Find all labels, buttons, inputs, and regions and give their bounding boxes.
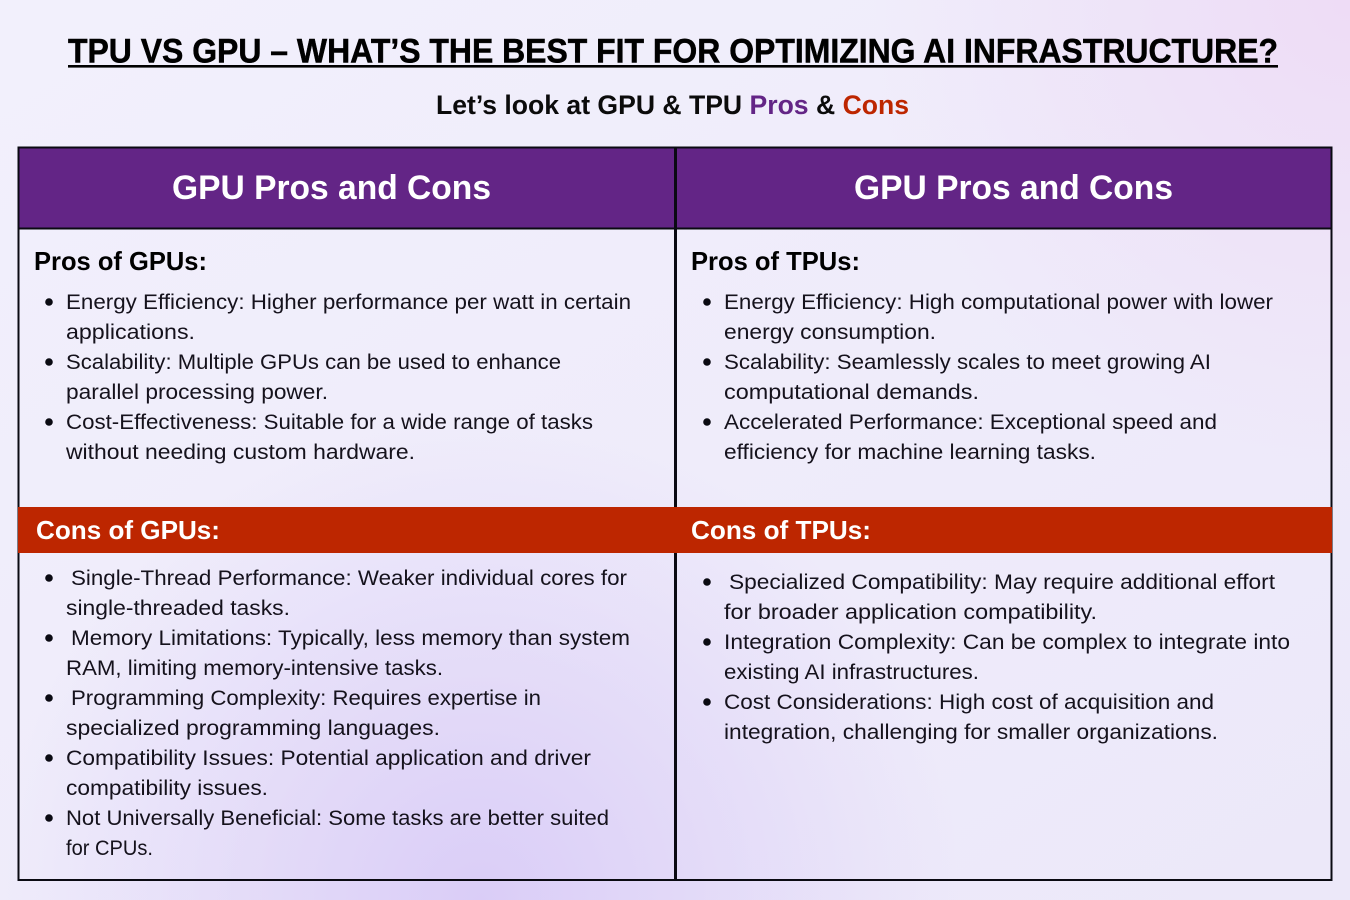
subtitle: Let’s look at GPU & TPU Pros & Cons bbox=[436, 90, 909, 120]
red band: cons headings: Cons of GPUs: bbox=[36, 515, 220, 545]
list: pros of TPUs bbox=[703, 290, 1273, 464]
list: cons of GPUs: for CPUs. bbox=[66, 836, 153, 860]
header: right column: GPU Pros and Cons bbox=[854, 169, 1173, 207]
list: pros of TPUs: Accelerated Performance: Exceptional speed and bbox=[724, 410, 1217, 434]
list: pros of GPUs: parallel processing power. bbox=[66, 380, 328, 404]
list: pros of GPUs: applications. bbox=[66, 320, 195, 344]
list: cons of TPUs: existing AI infrastructures. bbox=[724, 660, 979, 684]
list: cons of TPUs: for broader application compatibility. bbox=[724, 600, 1097, 624]
list: cons of GPUs: Not Universally Beneficial: Some tasks are better suited bbox=[66, 806, 609, 830]
list: cons of TPUs: Specialized Compatibility: May require additional effort bbox=[729, 570, 1275, 594]
table frame bbox=[18, 147, 1332, 880]
list: cons of GPUs: specialized programming languages. bbox=[66, 716, 440, 740]
list: cons of GPUs: compatibility issues. bbox=[66, 776, 268, 800]
list: pros of GPUs: Cost-Effectiveness: Suitable for a wide range of tasks bbox=[66, 410, 593, 434]
panel: pros of TPUs bbox=[691, 246, 1273, 464]
list: cons of GPUs: Memory Limitations: Typically, less memory than system bbox=[71, 626, 630, 650]
list: pros of TPUs: efficiency for machine learning tasks. bbox=[724, 440, 1096, 464]
header: right column bbox=[675, 147, 1332, 229]
red band: cons headings bbox=[18, 507, 1332, 553]
header: left column bbox=[18, 147, 675, 229]
list: cons of GPUs bbox=[45, 566, 630, 860]
header: left column: GPU Pros and Cons bbox=[172, 169, 491, 207]
list: cons of TPUs: Integration Complexity: Can be complex to integrate into bbox=[724, 630, 1290, 654]
list: cons of GPUs: Compatibility Issues: Potential application and driver bbox=[66, 746, 591, 770]
list: pros of GPUs: Energy Efficiency: Higher performance per watt in certain bbox=[66, 290, 631, 314]
heading: pros of GPUs: Pros of GPUs: bbox=[34, 246, 207, 276]
red band: cons headings: Cons of TPUs: bbox=[691, 515, 871, 545]
list: pros of GPUs bbox=[45, 290, 631, 464]
comparison table bbox=[18, 147, 1332, 880]
list: cons of GPUs: RAM, limiting memory-intensive tasks. bbox=[66, 656, 443, 680]
list: cons of TPUs: Cost Considerations: High cost of acquisition and bbox=[724, 690, 1214, 714]
title: TPU VS GPU – WHAT’S THE BEST FIT FOR OPTIMIZING AI INFRASTRUCTURE? bbox=[68, 32, 1278, 70]
list: cons of GPUs: Programming Complexity: Requires expertise in bbox=[71, 686, 541, 710]
list: pros of TPUs: computational demands. bbox=[724, 380, 979, 404]
list: cons of GPUs: Single-Thread Performance: Weaker individual cores for bbox=[71, 566, 627, 590]
list: cons of TPUs bbox=[703, 570, 1290, 744]
list: pros of GPUs: without needing custom hardware. bbox=[65, 440, 415, 464]
panel: pros of GPUs bbox=[34, 246, 631, 464]
heading: pros of TPUs: Pros of TPUs: bbox=[691, 246, 860, 276]
list: cons of TPUs: integration, challenging for smaller organizations. bbox=[724, 720, 1218, 744]
list: pros of TPUs: energy consumption. bbox=[724, 320, 936, 344]
list: pros of GPUs: Scalability: Multiple GPUs can be used to enhance bbox=[66, 350, 561, 374]
list: pros of TPUs: Energy Efficiency: High computational power with lower bbox=[724, 290, 1273, 314]
list: pros of TPUs: Scalability: Seamlessly scales to meet growing AI bbox=[724, 350, 1211, 374]
list: cons of GPUs: single-threaded tasks. bbox=[66, 596, 290, 620]
